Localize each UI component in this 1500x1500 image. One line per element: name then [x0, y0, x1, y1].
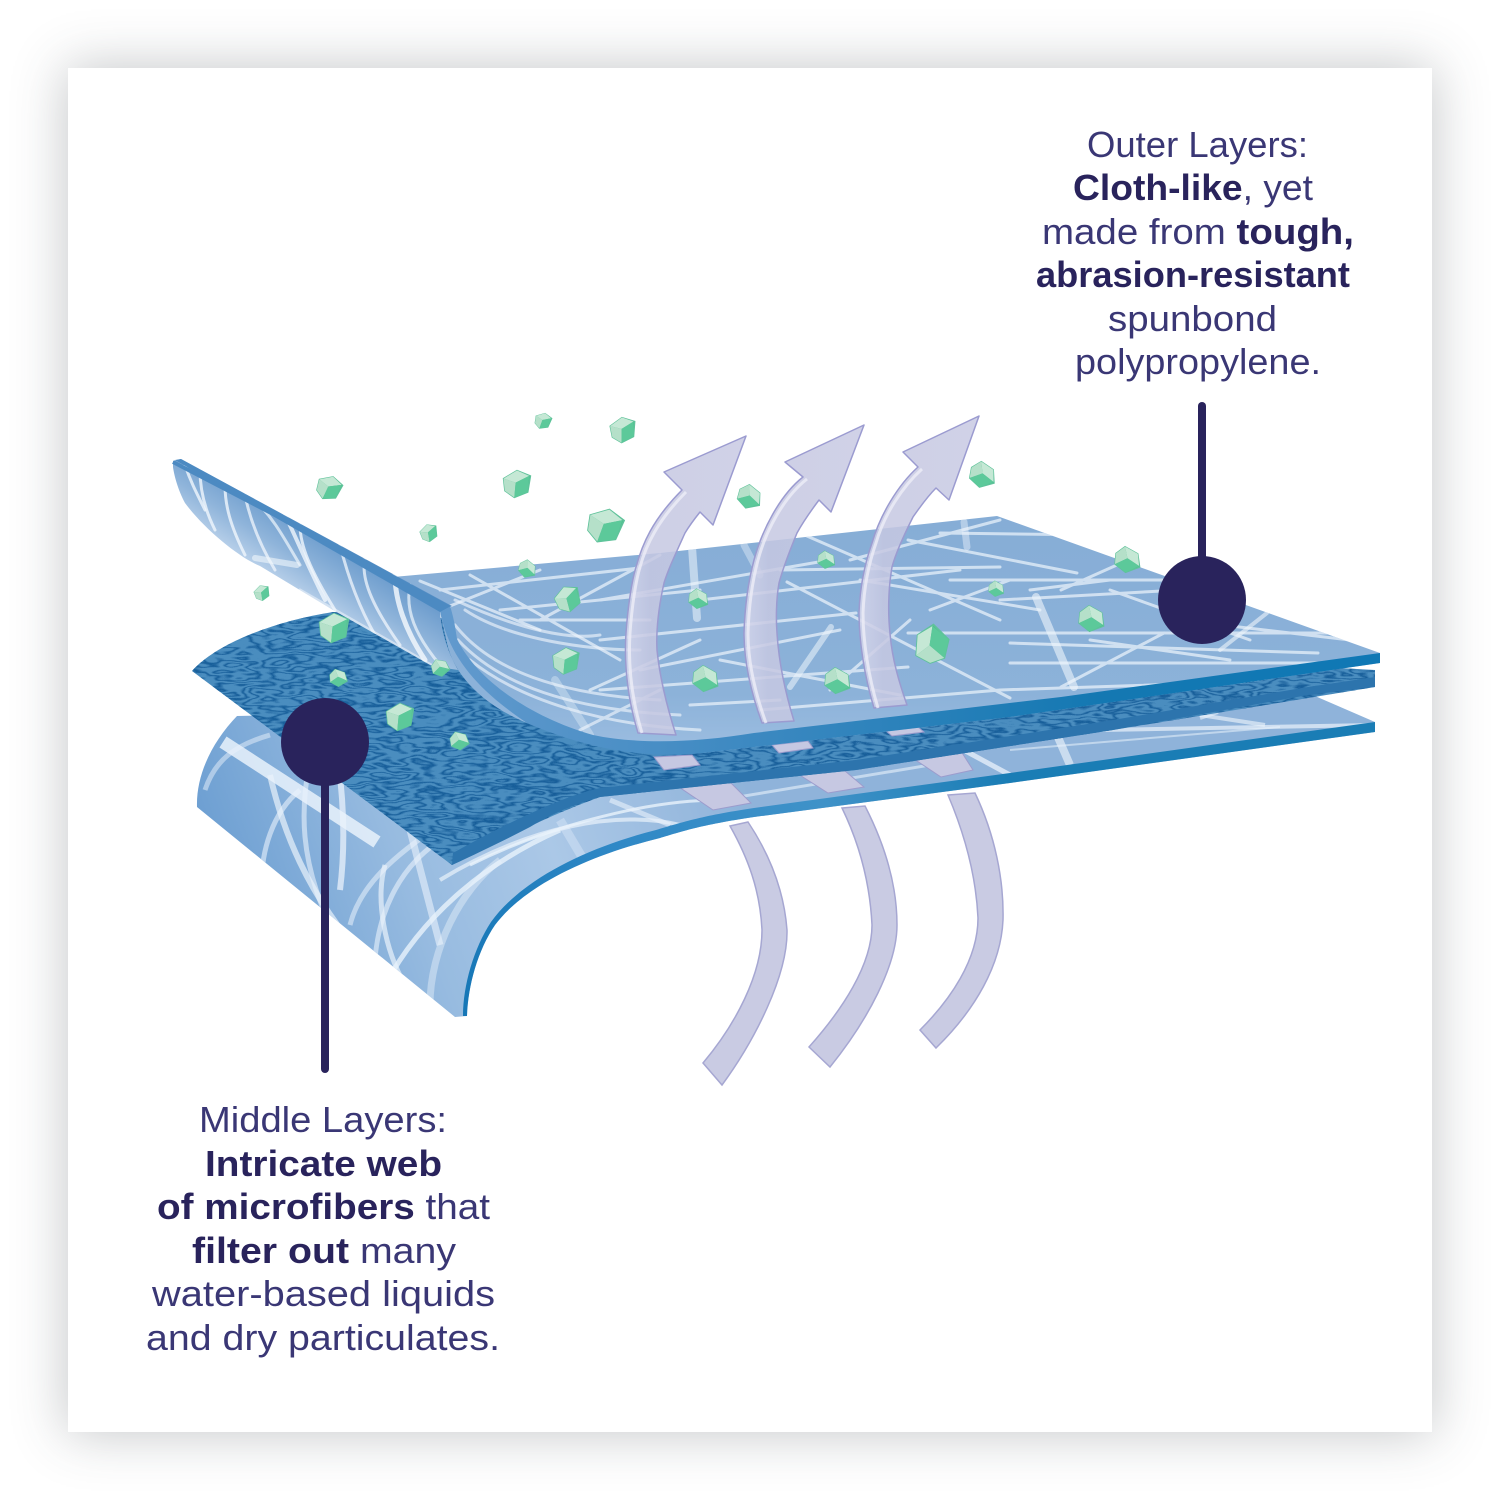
text block: middle layers: filter out many: [192, 1230, 456, 1271]
callout marker: middle layers: [281, 698, 369, 1073]
text block: outer layers: polypropylene.: [1075, 341, 1321, 382]
text block: middle layers: Middle Layers:: [199, 1099, 447, 1140]
text block: middle layers: Intricate web: [205, 1143, 442, 1184]
text block: outer layers: Cloth-like, yet: [1073, 167, 1313, 208]
illustration: layered fabric diagram: [173, 402, 1380, 1085]
middle sheet front edge: [452, 677, 1375, 865]
text block: middle layers: and dry particulates.: [146, 1317, 500, 1358]
upward airflow arrows: [626, 416, 979, 735]
particles: green cubes: [253, 411, 1144, 754]
text block: middle layers: [146, 1099, 500, 1358]
callout marker: outer layers: [1158, 402, 1246, 644]
top outer layer sheet: [393, 516, 1380, 755]
lower airflow arrows: [703, 793, 1003, 1085]
curled flap of top layer: [173, 459, 458, 670]
airflow segments between top and middle layer: [654, 727, 924, 770]
top sheet front edge and curl: [440, 606, 1380, 755]
text block: middle layers: water-based liquids: [151, 1273, 495, 1314]
text block: middle layers: of microfibers that: [157, 1186, 490, 1227]
text block: outer layers: spunbond: [1108, 298, 1277, 339]
text block: outer layers: abrasion-resistant: [1036, 254, 1350, 295]
middle layer sheet: [192, 612, 1375, 865]
bottom sheet front edge: [463, 722, 1375, 1016]
text block: outer layers: [1036, 124, 1354, 382]
airflow segments on bottom sheet: [679, 748, 973, 810]
bottom outer layer sheet: [197, 693, 1375, 1017]
text block: outer layers: made from tough,: [1042, 211, 1354, 252]
text block: outer layers: Outer Layers:: [1087, 124, 1308, 165]
